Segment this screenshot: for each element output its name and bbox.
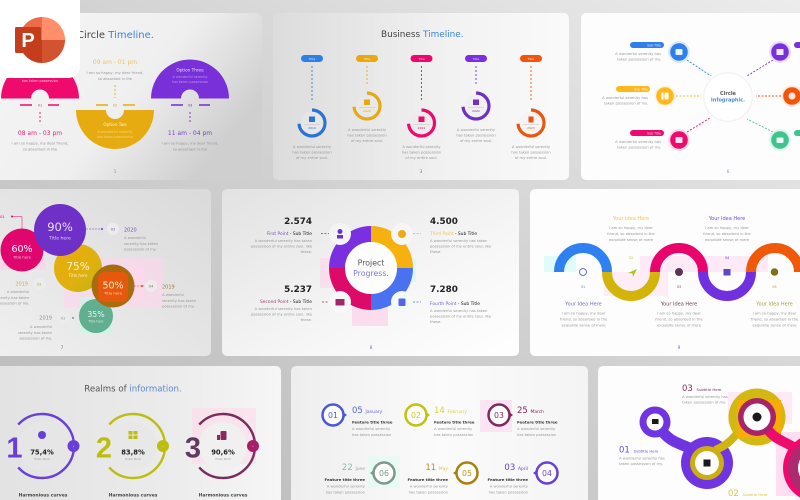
feature: 01 January: has taken possession: [352, 433, 392, 437]
idea: top purple: exquisite sense of mere: [705, 238, 750, 242]
option descriptions: so absorbed in the: [173, 148, 208, 152]
feature: 05 May: [407, 462, 478, 494]
option labels: A wonderful serenity: [97, 130, 133, 134]
feature: 06 June: A wonderful serenity: [327, 484, 366, 488]
step: 2023: Title: [527, 57, 534, 61]
node: middle left: [602, 86, 676, 106]
option labels: has taken possession: [22, 79, 58, 83]
idea: top purple: [703, 216, 751, 242]
label: 03 2019: 03: [37, 282, 42, 286]
idea: top yellow: exquisite sense of mere: [609, 238, 654, 242]
subtitle: 03: 03 Subtitle Here: [682, 384, 722, 394]
timeline axis markers: 03: [188, 104, 192, 108]
stat: first point: [251, 217, 329, 254]
stat: third point: [413, 217, 492, 254]
heading: business timeline: Business Timeline.: [381, 30, 464, 40]
step: 2022: [456, 55, 496, 143]
feature: 01 January: [322, 404, 393, 437]
icon: second point: [329, 291, 351, 313]
connected rings diagram: [640, 388, 800, 500]
heading: circle timeline: Circle Timeline.: [77, 30, 154, 41]
feature: 01 January: A wonderful serenity: [352, 427, 391, 431]
feature: 04 April: Feature title three: [487, 477, 528, 482]
donut centre label: Project: [358, 258, 384, 268]
feature: 06 June: has taken possession: [326, 490, 366, 494]
step: 2019: [292, 55, 332, 160]
feature: 02 February: 14 February: [434, 406, 467, 416]
donut centre label: Progress.: [353, 269, 389, 278]
stat: first point: First Point - Sub Title: [267, 231, 312, 237]
bubble: 35%: 35%: [87, 310, 105, 319]
page number: 3: [420, 169, 423, 174]
node: top left: A wonderful serenity has: [615, 52, 661, 56]
stat: second point: [251, 285, 329, 322]
feature: 04 April: A wonderful serenity: [490, 484, 529, 488]
idea: bottom blue: [560, 302, 608, 328]
subtitle: 03: A wonderful serenity has: [682, 395, 728, 399]
panel: percentage bubbles: [0, 189, 211, 356]
option descriptions: I am so happy, my dear friend,: [162, 142, 218, 146]
wave icons and numbers: [580, 256, 778, 289]
step: 2022: of my entire soul.: [460, 139, 492, 143]
idea: top purple: Your Idea Here: [708, 216, 745, 222]
gauge: 75,4%: 1: [6, 432, 23, 464]
step: 2019: 2019: [308, 126, 316, 130]
step: 2021: of my entire soul.: [405, 156, 438, 160]
option labels: has taken possession: [97, 135, 133, 139]
idea: bottom blue: I am so happy, my dear: [562, 312, 606, 316]
icon: first point: [329, 223, 351, 245]
subtitle: 01: [619, 446, 665, 466]
gauge: 75,4%: 75,4%: [30, 448, 54, 456]
timeline axis markers: 01: [38, 104, 42, 108]
option descriptions: so absorbed in the: [98, 77, 133, 81]
wave icons and numbers: 05: [772, 285, 777, 289]
step: 2023: A wonderful serenity: [512, 145, 551, 149]
bubble: 35%: [79, 299, 113, 333]
feature: 02 February: [406, 404, 475, 437]
node: middle right: [782, 86, 800, 106]
bubble: 60%: 60%: [11, 244, 33, 255]
step: 2021: [402, 55, 442, 160]
half circle: purple: [151, 59, 229, 98]
feature: 04 April: has taken possession: [489, 490, 529, 494]
captions: Harmonious curves: [199, 492, 248, 498]
half circle: pink: [1, 60, 79, 98]
option descriptions: I am so happy, my dear friend,: [12, 142, 68, 146]
centre circle: Circle: [720, 91, 737, 97]
time labels: 09 am - 01 pm: [93, 59, 137, 66]
subtitle: 01: taken possession of my.: [619, 462, 663, 466]
gauge: 75,4%: [6, 414, 80, 478]
label: 02 2020: possession of my.: [124, 248, 157, 252]
step: 2022: A wonderful serenity: [457, 128, 496, 132]
idea: bottom olive: I am so happy, my dear: [753, 312, 797, 316]
panel: wave timeline: [530, 189, 800, 356]
option labels: A wonderful serenity: [172, 75, 208, 79]
stat: fourth point: possession of my entire soul, like: [430, 314, 492, 318]
option labels: Option Two: [103, 122, 127, 127]
label: 01 2019: serenity has taken: [18, 331, 53, 335]
subtitle: 03: taken possession of my.: [682, 400, 726, 404]
bubble: 75%: 75%: [66, 261, 90, 273]
stat: second point: Second Point - Sub Title: [260, 299, 312, 305]
label: 02 2020: serenity has taken: [124, 242, 159, 246]
stat: fourth point: [413, 285, 492, 324]
node: top left: Sub Title: [647, 44, 661, 48]
feature: 02 February: 02: [411, 411, 421, 420]
node: bottom left: [615, 129, 690, 151]
feature: 05 May: 05: [462, 469, 472, 478]
label: 02 2020: [86, 223, 159, 252]
stat: third point: possession of my entire soul, like: [430, 244, 492, 248]
gauge: 83,8%: 2: [96, 432, 112, 464]
label: top left marker: [0, 214, 22, 230]
step: 2020: Title: [363, 57, 370, 61]
idea: top yellow: [607, 216, 655, 242]
label: 04 2019: 04: [149, 284, 154, 288]
stat: second point: 5.237: [284, 285, 312, 295]
page number: 1: [114, 169, 117, 174]
feature: 03 March: [488, 404, 558, 437]
feature: 03 March: A wonderful serenity: [517, 427, 556, 431]
feature: 01 January: Feature title three: [352, 420, 393, 424]
feature: 03 March: Feature title three: [517, 420, 558, 424]
step: 2023: 2023: [527, 126, 535, 130]
timeline axis markers: [20, 85, 210, 124]
bubble: 50%: [92, 264, 134, 308]
idea: top purple: I am so happy, my dear: [705, 226, 749, 230]
bubble: 35%: Title here: [87, 320, 104, 324]
feature: 02 February: Feature title three: [434, 420, 475, 424]
label: 01 2019: A wonderful: [30, 325, 52, 329]
label: 03 2019: A wonderful: [7, 290, 29, 294]
half circle: yellow: [76, 110, 154, 149]
step: 2022: 2022: [472, 109, 480, 113]
stat: third point: Third Point - Sub Title: [429, 231, 477, 237]
idea: bottom olive: Your Idea Here: [755, 302, 793, 308]
feature: 03 March: has taken possession: [517, 433, 557, 437]
feature: 05 May: A wonderful serenity: [410, 484, 449, 488]
idea: bottom dark: friend, so absorbed in the: [655, 318, 703, 322]
step: 2022: Title: [472, 57, 479, 61]
node: bottom right: [769, 129, 800, 151]
panel: realms of information: [0, 366, 281, 500]
feature: 01 January: 05 January: [352, 406, 383, 416]
idea: top yellow: Your Idea Here: [612, 216, 649, 222]
option labels: Option Three: [176, 68, 204, 72]
step: 2023: has taken possession: [511, 150, 551, 154]
node: bottom left: taken possession of my.: [617, 146, 661, 150]
option descriptions: [12, 71, 218, 152]
bubble: 90%: 90%: [47, 220, 73, 234]
stat: second point: possession of my entire soul, like: [251, 312, 313, 316]
label: 04 2019: serenity has taken: [162, 299, 197, 303]
wave ribbon: [559, 248, 799, 296]
stat: fourth point: 7.280: [430, 285, 458, 295]
stat: fourth point: Fourth Point - Sub Title: [430, 301, 480, 307]
gauge: 83,8%: 83,8%: [121, 448, 145, 456]
feature: 05 May: has taken possession: [409, 490, 449, 494]
idea: bottom dark: [655, 302, 703, 328]
node: middle left: taken possession of my.: [604, 102, 648, 106]
connector lines: [676, 60, 781, 132]
page number: 8: [370, 345, 373, 350]
panel: circle timeline: [0, 13, 262, 180]
gauge: 90,6%: 3: [185, 432, 201, 464]
gauge: 83,8%: [96, 414, 169, 478]
idea: bottom blue: Your Idea Here: [564, 302, 602, 308]
feature: 06 June: 06: [379, 469, 389, 478]
stat: fourth point: A wonderful serenity has taken: [430, 309, 488, 313]
feature: 04 April: 03 April: [504, 463, 528, 473]
gauge: 90,6%: Enter Point: [215, 457, 232, 461]
feature: 06 June: Feature title three: [324, 477, 365, 482]
step: 2020: [347, 55, 387, 143]
step: 2021: A wonderful serenity: [402, 145, 441, 149]
step: 2019: has taken possession: [292, 150, 332, 154]
wave icons and numbers: 03: [677, 285, 681, 289]
idea: bottom dark: I am so happy, my dear: [657, 312, 701, 316]
centre circle: [703, 72, 753, 122]
idea: bottom olive: exquisite sense of mere: [752, 324, 797, 328]
captions: Harmonious curves: [19, 492, 68, 498]
idea: top yellow: I am so happy, my dear: [609, 226, 653, 230]
step: 2020: has taken possession: [347, 134, 387, 138]
gauge: 83,8%: Enter Point: [125, 457, 142, 461]
gauge: 90,6%: [185, 414, 259, 478]
label: 04 2019: [134, 280, 197, 308]
captions: Harmonious curves: [109, 492, 158, 498]
panel: project progress: [222, 189, 519, 356]
stat: third point: 4.500: [430, 217, 458, 227]
feature: 06 June: 22 June: [342, 463, 365, 473]
gauge: 75,4%: Enter Point: [34, 457, 51, 461]
stat: first point: possession of my entire soul, like: [251, 244, 313, 248]
gauge: 90,6%: 90,6%: [211, 448, 235, 456]
feature: 01 January: 01: [328, 411, 338, 420]
step: 2019: of my entire soul.: [296, 156, 328, 160]
feature: 03 March: 03: [494, 411, 504, 420]
idea: bottom blue: friend, so absorbed in the: [560, 318, 608, 322]
node: top left: [615, 41, 690, 63]
stat: first point: 2.574: [284, 217, 312, 227]
option descriptions: I am so happy, my dear friend,: [87, 71, 143, 75]
node: middle left: Sub Title: [634, 88, 648, 92]
stat: second point: A wonderful serenity has taken: [255, 307, 313, 311]
option labels: has taken possession: [172, 80, 208, 84]
donut centre label: [353, 258, 389, 278]
label: 04 2019: 2019: [162, 284, 175, 290]
bubble: 90%: Title here: [48, 236, 71, 242]
time labels: 08 am - 03 pm: [18, 130, 62, 137]
time labels: [18, 59, 212, 137]
label: 04 2019: possession of my.: [162, 304, 195, 308]
feature: 05 May: Feature title three: [407, 477, 448, 482]
label: 03 2019: 2019: [15, 282, 28, 288]
node: bottom left: Sub Title: [647, 132, 661, 136]
panel: business timeline: [273, 13, 569, 180]
node: bottom left: A wonderful serenity has: [615, 140, 661, 144]
step: 2019: Title: [308, 57, 315, 61]
icon: PowerPoint badge: [0, 0, 80, 78]
label: 03 2019: [0, 278, 45, 306]
feature: 05 May: 11 May: [425, 463, 448, 473]
icon: fourth point: [391, 291, 413, 313]
feature: 02 February: has taken possession: [434, 433, 474, 437]
bubble: 60%: Title here: [12, 254, 32, 260]
label: 04 2019: A wonderful: [162, 293, 184, 297]
idea: top yellow: friend, so absorbed in the: [607, 232, 655, 236]
node: top right: [769, 41, 800, 63]
stat: fourth point: these.: [430, 320, 441, 324]
icon: PowerPoint badge: P: [21, 30, 35, 52]
step: 2019: A wonderful serenity: [293, 145, 332, 149]
step: 2023: of my entire soul.: [515, 156, 547, 160]
feature: 06 June: [324, 462, 394, 494]
bubble: 75%: Title here: [68, 273, 88, 278]
step: 2022: has taken possession: [456, 134, 496, 138]
node: middle left: A wonderful serenity has: [602, 96, 648, 100]
bubble: 60%: [0, 228, 44, 272]
stat: second point: these.: [301, 318, 312, 322]
panel: circle infographic: [581, 13, 800, 180]
bubble: 50%: Title here: [103, 290, 123, 296]
step: 2020: A wonderful serenity: [348, 128, 387, 132]
bubble: 50%: 50%: [102, 280, 124, 292]
captions: [19, 492, 248, 498]
label: 01 2019: [18, 312, 74, 340]
subtitle: 01: 01 Subtitle Here: [619, 446, 659, 456]
label: top left marker: 01: [0, 214, 5, 219]
option descriptions: so absorbed in the: [23, 148, 58, 152]
idea: bottom dark: exquisite sense of mere: [657, 324, 702, 328]
feature: 03 March: 25 March: [517, 406, 544, 416]
wave icons and numbers: 01: [581, 285, 585, 289]
option labels: [22, 68, 208, 139]
page number: 7: [61, 345, 64, 350]
subtitle: 02: 02 Subtitle Here: [728, 489, 768, 499]
stat: first point: these.: [301, 250, 312, 254]
subtitle: 03: [682, 384, 728, 404]
subtitle: 01: A wonderful serenity has: [619, 456, 665, 460]
stat: third point: A wonderful serenity has taken: [430, 239, 488, 243]
step: 2021: 2021: [418, 126, 425, 130]
label: 02 2020: 02: [111, 226, 116, 232]
time labels: 11 am - 04 pm: [168, 130, 212, 137]
donut chart: [337, 234, 405, 302]
idea: top purple: friend, so absorbed in the: [703, 232, 751, 236]
feature: 02 February: A wonderful serenity: [434, 427, 473, 431]
gauge: 90,6%: ›: [252, 444, 254, 448]
gauge: 75,4%: ›: [73, 444, 75, 448]
feature: 04 April: 04: [542, 469, 552, 478]
feature: 04 April: [487, 462, 558, 494]
idea: bottom blue: exquisite sense of mere: [561, 324, 606, 328]
step: 2021: has taken possession: [402, 150, 442, 154]
stat: first point: A wonderful serenity has taken: [255, 239, 313, 243]
bubble: 90%: [34, 204, 86, 256]
label: 01 2019: 01: [61, 316, 66, 320]
step: 2021: Title: [417, 57, 425, 61]
label: 01 2019: possession of my.: [20, 336, 52, 340]
ring icons: [652, 412, 762, 466]
gauge: 83,8%: ›: [162, 444, 164, 448]
label: 02 2020: 2020: [124, 228, 137, 234]
label: 01 2019: 2019: [39, 316, 52, 322]
page number: 9: [678, 345, 681, 350]
idea: bottom dark: Your Idea Here: [660, 302, 697, 308]
label: 02 2020: A wonderful: [124, 236, 146, 240]
timeline axis markers: 02: [113, 104, 117, 108]
bubble: 75%: [54, 244, 102, 292]
panel: connected rings: [598, 366, 800, 500]
stat: third point: these.: [430, 250, 441, 254]
centre circle: Infographic.: [711, 98, 745, 104]
step: 2020: of my entire soul.: [351, 139, 383, 143]
node: top left: taken possession of my.: [617, 58, 661, 62]
icon: third point: [391, 223, 413, 245]
wave icons and numbers: 02: [629, 256, 633, 260]
heading: realms of information: Realms of information.: [84, 384, 182, 394]
idea: bottom olive: friend, so absorbed in the: [751, 318, 799, 322]
panel: monthly features: [291, 366, 588, 500]
idea: bottom olive: [751, 302, 799, 328]
page number: 6: [727, 169, 730, 174]
step: 2023: [511, 55, 551, 160]
wave icons and numbers: 04: [725, 256, 729, 260]
step: 2020: 2020: [363, 109, 371, 113]
